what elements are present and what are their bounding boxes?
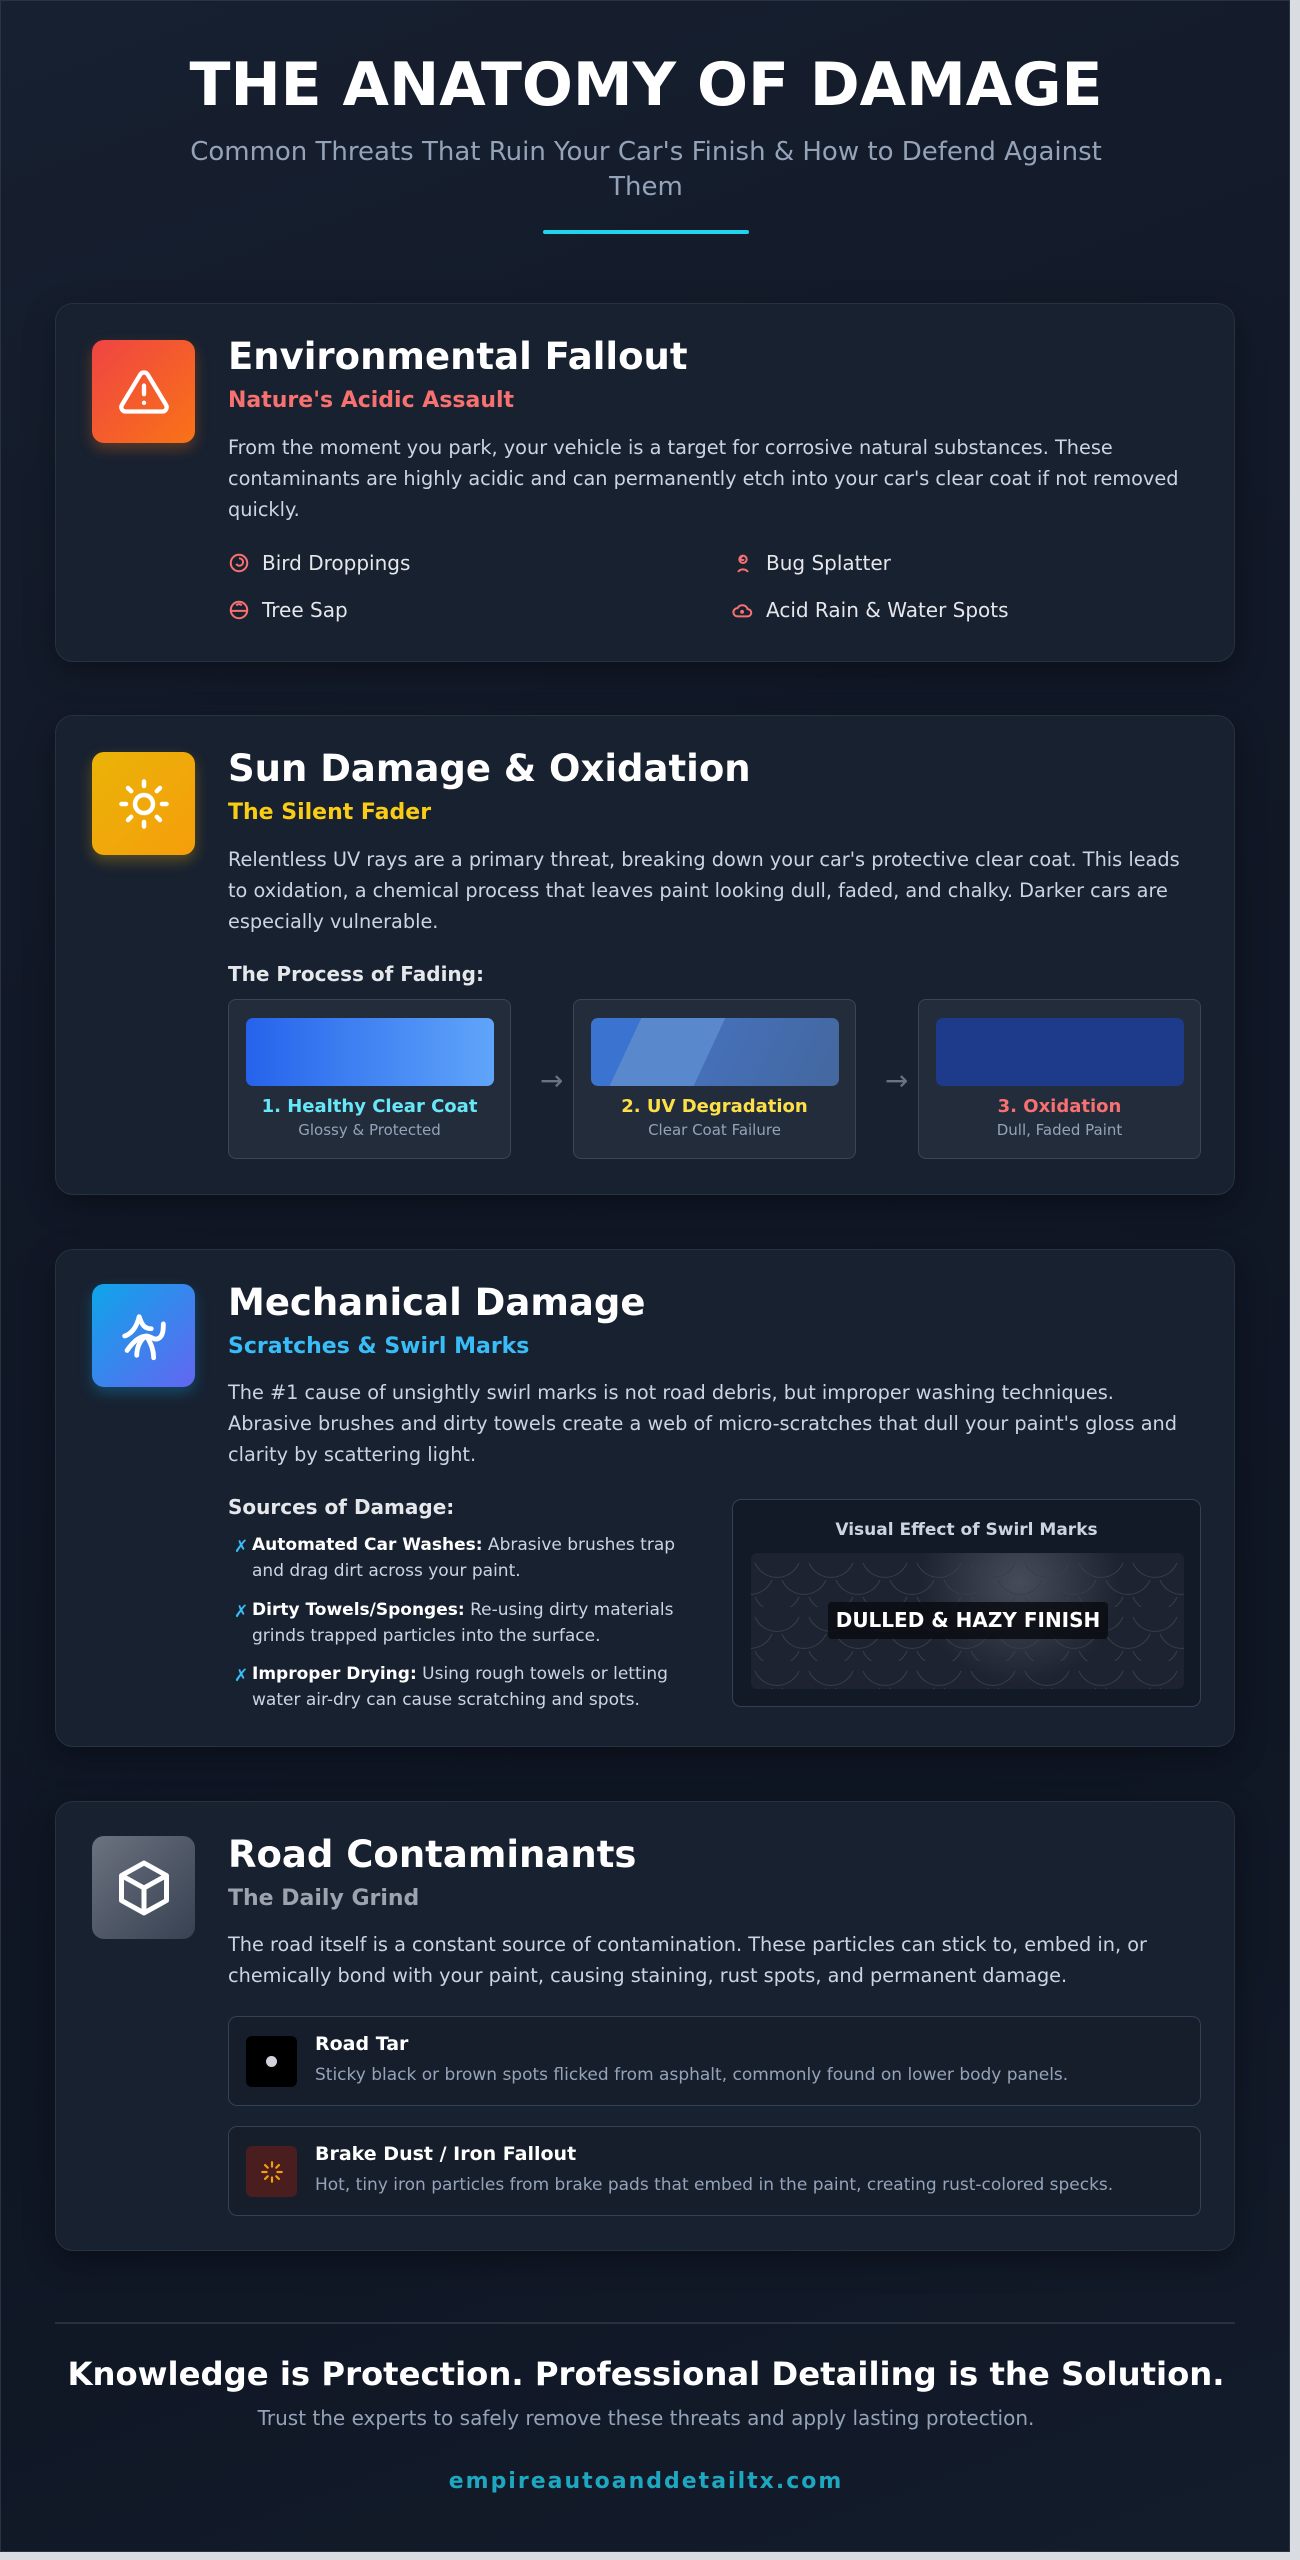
item: brake dust: Hot, tiny iron particles from brake pads that embed in the paint, creating rust-colored specks. — [315, 2175, 1113, 2195]
swirl visual box — [732, 1499, 1201, 1707]
item: bug splatter: Bug Splatter — [766, 551, 891, 575]
card: uv degradation — [573, 999, 856, 1159]
arrow: → — [885, 1064, 908, 1097]
process heading: The Process of Fading: — [228, 962, 484, 986]
label: dulled finish — [828, 1602, 1108, 1639]
icon: cube — [92, 1836, 195, 1939]
card: oxidation: 3. Oxidation — [998, 1096, 1121, 1117]
card: oxidation — [918, 999, 1201, 1159]
subheading: Scratches & Swirl Marks — [228, 1334, 529, 1359]
footer heading: Knowledge is Protection. Professional Detailing is the Solution. — [67, 2355, 1225, 2393]
source: car washes: Automated Car Washes: Abrasive brushes trap and drag dirt across your paint. — [252, 1535, 675, 1581]
item: brake dust: Brake Dust / Iron Fallout — [315, 2143, 576, 2165]
source: car washes: ✗ — [234, 1537, 248, 1557]
icon: sun — [92, 752, 195, 855]
card: healthy: Glossy & Protected — [298, 1121, 441, 1139]
panel: mechanical damage — [55, 1249, 1235, 1747]
item: bird droppings: Bird Droppings — [262, 551, 410, 575]
item: road tar: Road Tar — [315, 2033, 408, 2055]
swirl pattern — [751, 1553, 1184, 1689]
card: uv degradation: Clear Coat Failure — [648, 1121, 781, 1139]
heading: Sun Damage & Oxidation — [228, 747, 751, 790]
footer subtext: Trust the experts to safely remove these threats and apply lasting protection. — [258, 2406, 1034, 2430]
heading: Mechanical Damage — [228, 1281, 645, 1324]
icon: tar — [246, 2036, 297, 2087]
arrow: → — [540, 1064, 563, 1097]
icon: iron — [246, 2146, 297, 2197]
heading: Environmental Fallout — [228, 335, 688, 378]
card: uv degradation: 2. UV Degradation — [621, 1096, 808, 1117]
panel: environmental fallout — [55, 303, 1235, 662]
subheading: The Daily Grind — [228, 1886, 419, 1911]
subtitle: Common Threats That Ruin Your Car's Finish & How to Defend Against Them — [190, 137, 1102, 202]
item: acid rain: Acid Rain & Water Spots — [766, 598, 1009, 622]
card: healthy: 1. Healthy Clear Coat — [262, 1096, 477, 1117]
card: healthy — [228, 999, 511, 1159]
source: towels: Dirty Towels/Sponges: Re-using dirty materials grinds trapped particles into the surface. — [252, 1600, 674, 1646]
panel: road contaminants — [55, 1801, 1235, 2251]
heading: Road Contaminants — [228, 1833, 636, 1876]
item: road tar: Sticky black or brown spots flicked from asphalt, commonly found on lower body panels. — [315, 2065, 1068, 2085]
body text: The #1 cause of unsightly swirl marks is not road debris, but improper washing techniques. Abrasive brushes and dirty towels create a web of micro-scratches that dull your paint's gloss and clarity by scattering light. — [228, 1381, 1177, 1466]
source: towels: ✗ — [234, 1602, 248, 1622]
source: drying: Improper Drying: Using rough towels or letting water air-dry can cause scratching and spots. — [252, 1664, 668, 1710]
body text: The road itself is a constant source of contamination. These particles can stick to, embed in, or chemically bond with your paint, causing staining, rust spots, and permanent damage. — [228, 1933, 1147, 1987]
icon: warning — [92, 340, 195, 443]
body text: From the moment you park, your vehicle is a target for corrosive natural substances. These contaminants are highly acidic and can permanently etch into your car's clear coat if not removed quickly. — [228, 436, 1178, 521]
item: road tar — [228, 2016, 1201, 2106]
sources heading: Sources of Damage: — [228, 1495, 454, 1519]
website url: empireautoanddetailtx.com — [449, 2469, 843, 2494]
accent line — [543, 230, 749, 234]
body text: Relentless UV rays are a primary threat, breaking down your car's protective clear coat. This leads to oxidation, a chemical process that leaves paint looking dull, faded, and chalky. Darker cars are especially vulnerable. — [228, 848, 1180, 933]
title: THE ANATOMY OF DAMAGE — [190, 50, 1102, 120]
label: dulled finish: DULLED & HAZY FINISH — [836, 1608, 1100, 1632]
panel: sun damage — [55, 715, 1235, 1195]
subheading: Nature's Acidic Assault — [228, 388, 514, 413]
item: brake dust — [228, 2126, 1201, 2216]
icon: scratches — [92, 1284, 195, 1387]
source: drying: ✗ — [234, 1666, 248, 1686]
subheading: The Silent Fader — [228, 800, 431, 825]
item: tree sap: Tree Sap — [262, 598, 348, 622]
swirl title: Visual Effect of Swirl Marks — [835, 1520, 1098, 1540]
card: oxidation: Dull, Faded Paint — [997, 1121, 1122, 1139]
